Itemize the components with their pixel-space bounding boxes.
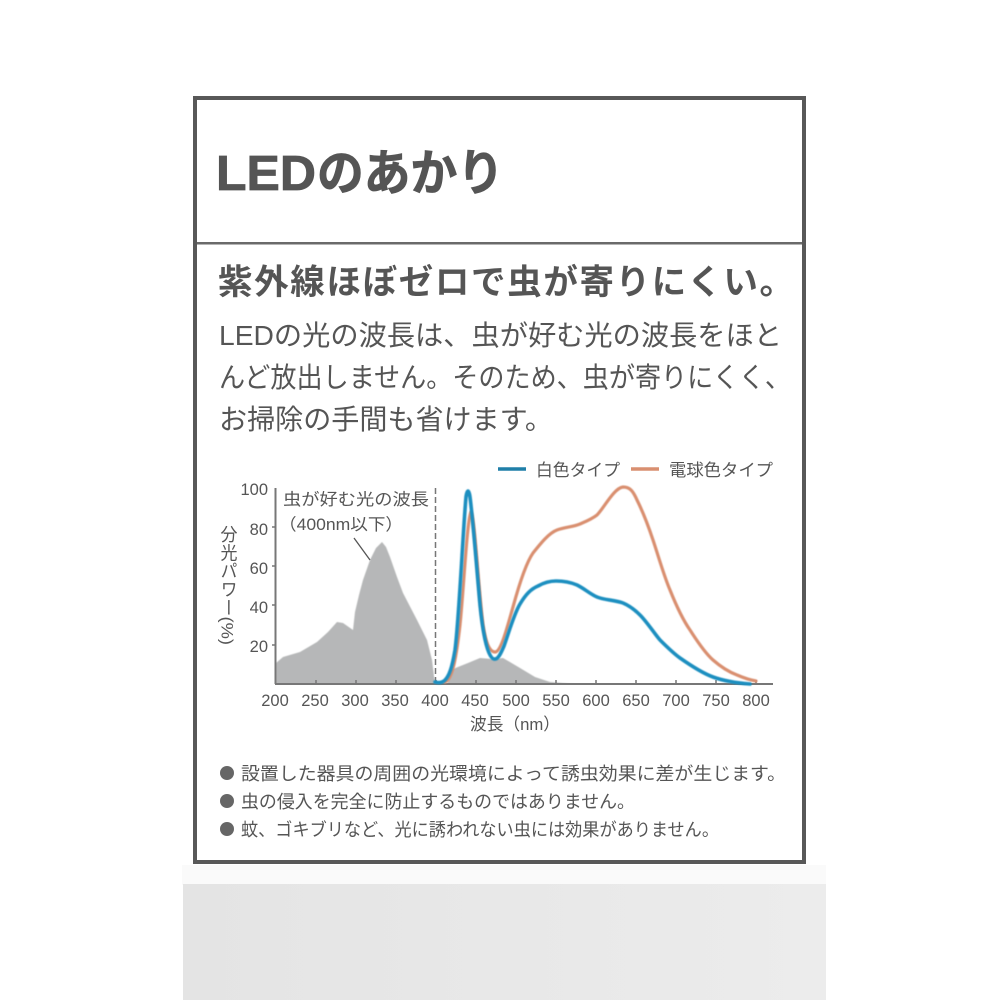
x axis labels: 250 [301, 692, 329, 710]
header divider [197, 242, 802, 244]
warm lamp curve [445, 487, 756, 682]
x axis labels: 750 [702, 692, 730, 710]
y axis labels: 40 [250, 599, 268, 617]
x axis labels: 450 [461, 692, 489, 710]
y axis labels [240, 481, 268, 656]
body text [219, 320, 791, 435]
x axis labels: 400 [421, 692, 449, 710]
body text: お掃除の手間も省けます。 [219, 404, 553, 435]
grey area: second bump [447, 658, 575, 684]
note 3: 蚊、ゴキブリなど、光に誘われない虫には効果がありません。 [241, 819, 719, 840]
legend: 白色タイプ [536, 461, 620, 480]
grey area: insect-attracting light [276, 542, 435, 684]
note 1: 設置した器具の周囲の光環境によって誘虫効果に差が生じます。 [241, 764, 786, 784]
y axis labels: 100 [240, 481, 268, 499]
y axis labels: 20 [250, 638, 268, 656]
note 2: 虫の侵入を完全に防止するものではありません。 [241, 792, 635, 812]
notes list [220, 764, 786, 840]
spectrum chart [218, 481, 773, 734]
body text: LEDの光の波長は、虫が好む光の波長をほと [219, 320, 782, 351]
chart annotation [279, 490, 429, 560]
product base band [182, 865, 826, 885]
x axis labels: 700 [662, 692, 690, 710]
white lamp curve [435, 491, 750, 684]
x axis labels: 600 [582, 692, 610, 710]
x axis labels: 550 [542, 692, 570, 710]
title [216, 147, 504, 201]
panel: card frame [195, 98, 804, 862]
legend: 電球色タイプ [669, 461, 773, 480]
x axis labels [261, 692, 770, 710]
dashed 400nm line [434, 488, 436, 684]
body text: んど放出しません。そのため、虫が寄りにくく、 [219, 362, 791, 393]
x axis labels: 650 [622, 692, 650, 710]
chart annotation: 虫が好む光の波長 [283, 490, 429, 509]
x axis labels: 300 [341, 692, 369, 710]
axes [272, 488, 773, 684]
y axis labels: 60 [250, 560, 268, 578]
product base block [183, 884, 826, 1000]
subheading: 紫外線ほぼゼロで虫が寄りにくい。 [218, 263, 794, 302]
y axis labels: 80 [250, 521, 268, 539]
x axis labels: 500 [502, 692, 530, 710]
y axis title: 分光パワー(%) [218, 525, 237, 645]
x axis labels: 200 [261, 692, 289, 710]
chart annotation: （400nm以下） [279, 515, 403, 534]
x axis labels: 800 [742, 692, 770, 710]
title: のあかり [317, 147, 504, 201]
legend [498, 461, 773, 480]
x axis labels: 350 [381, 692, 409, 710]
x axis title: 波長（nm） [470, 715, 560, 734]
title: LED [216, 147, 316, 201]
